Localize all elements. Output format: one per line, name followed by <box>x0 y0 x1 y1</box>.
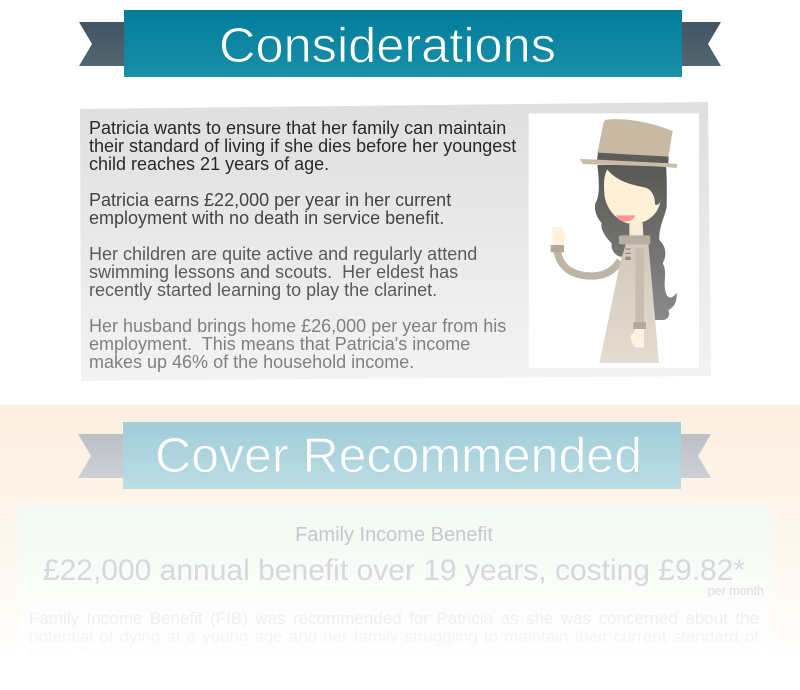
paragraph: standard of living: Patricia wants to ensure that her family can maintain <box>89 118 506 138</box>
paragraph: children: Her children are quite active and regularly attend <box>89 244 477 264</box>
banner: Cover Recommended <box>78 422 711 489</box>
paragraph: children <box>89 244 477 300</box>
scarf <box>619 235 650 244</box>
paragraph: children: swimming lessons and scouts. Her eldest has <box>89 262 458 282</box>
face <box>604 169 660 224</box>
paragraph: earnings <box>89 190 452 228</box>
paragraph: children: recently started learning to play the clarinet. <box>89 280 437 300</box>
panel background <box>80 102 711 381</box>
heading: Family Income Benefit: Family Income Benefit <box>295 524 493 546</box>
hat <box>579 119 677 168</box>
paragraph: standard of living: child reaches 21 years of age. <box>89 154 329 174</box>
right cuff <box>633 322 646 329</box>
headline: annual benefit and cost: £22,000 annual benefit over 19 years, costing £9.82* <box>43 554 745 587</box>
paragraph: husband's income: employment. This means that Patricia's income <box>89 334 470 354</box>
paragraph: husband's income <box>89 316 506 372</box>
banner: Cover Recommended: Cover Recommended <box>155 429 642 483</box>
panel: Patricia's circumstances <box>80 102 711 381</box>
paragraph: standard of living <box>89 118 516 174</box>
banner: Considerations <box>79 10 721 77</box>
neck <box>629 223 643 236</box>
mouth <box>616 215 635 221</box>
photo frame with illustration of Patricia <box>528 113 699 368</box>
scarf tails <box>625 248 631 260</box>
paragraph: husband's income: Her husband brings home £26,000 per year from his <box>89 316 506 336</box>
label: per month: per month <box>708 584 764 598</box>
section background: cover recommended <box>0 405 800 690</box>
text block: recommendation rationale: living. The household would effectively lose almost half of the regular monthly income to live on <box>29 645 759 664</box>
text block: recommendation rationale: potential of dying at a young age and her family struggling to maintain their current standard of <box>29 627 759 646</box>
paragraph: earnings: Patricia earns £22,000 per year in her current <box>89 190 451 210</box>
coat <box>599 243 659 363</box>
arm <box>557 252 620 276</box>
paragraph: standard of living: their standard of living if she dies before her youngest <box>89 136 516 156</box>
left cuff <box>551 245 564 252</box>
bottom fade <box>0 640 800 690</box>
paragraph: earnings: employment with no death in service benefit. <box>89 208 444 228</box>
left hand <box>552 227 566 245</box>
hair <box>595 165 677 320</box>
right hand <box>630 329 644 347</box>
banner: Considerations: Considerations <box>219 19 556 73</box>
paragraph: husband's income: makes up 46% of the household income. <box>89 352 414 372</box>
sleeve <box>635 248 644 323</box>
text block: recommendation rationale: Family Income Benefit (FIB) was recommended for Patricia as she was concerned about the <box>29 609 759 628</box>
panel: Family Income Benefit recommendation <box>18 505 770 665</box>
